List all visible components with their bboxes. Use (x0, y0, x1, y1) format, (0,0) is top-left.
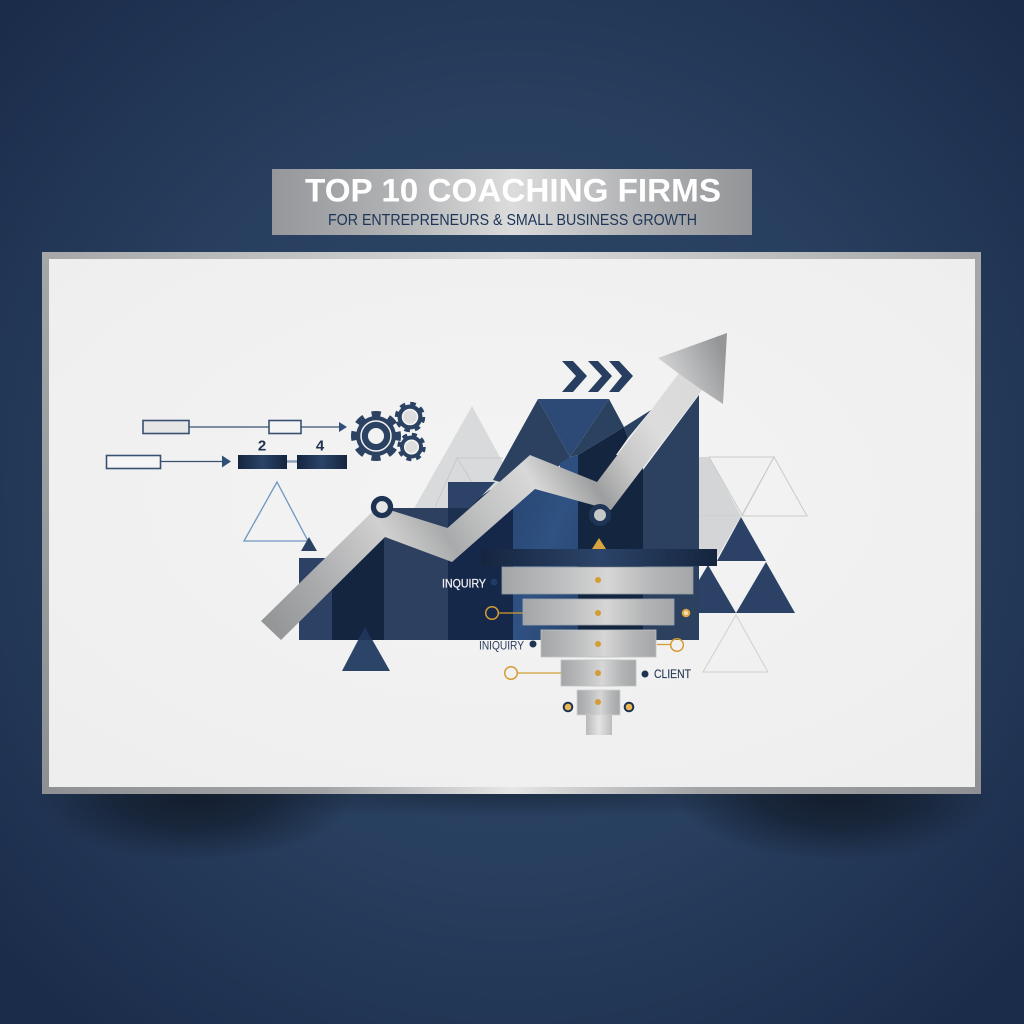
gold triangle (592, 538, 606, 549)
bar 4 upper part (448, 482, 495, 508)
bar 5 (513, 470, 578, 640)
icon: bottom triangle (342, 627, 390, 671)
tier 6 (586, 715, 612, 735)
flow row one (143, 420, 347, 434)
arrow shaft (261, 365, 702, 640)
flow row two (106, 455, 347, 469)
dark triangles right (699, 517, 795, 613)
bar 4 (448, 490, 514, 640)
bar 3 (384, 508, 448, 640)
tier 5 (577, 690, 620, 715)
growth arrow (261, 333, 727, 640)
panel: main card (42, 252, 981, 794)
bar chart (299, 395, 699, 640)
large gear (354, 414, 398, 458)
label: inquiry: INQUIRY (442, 576, 486, 590)
label: client (642, 669, 691, 681)
connector: gold ring right tier 3 (657, 639, 683, 651)
tier dots (595, 577, 601, 705)
label: iniquiry: INIQUIRY (479, 638, 524, 652)
tier 1 (502, 567, 693, 594)
connector: gold ring left tier 4 (505, 667, 561, 679)
tier 3 (541, 630, 656, 657)
bar 1 (299, 558, 332, 640)
arrow head (658, 333, 727, 404)
chevrons (562, 361, 633, 392)
marker: right bottom (625, 703, 633, 711)
card shadow (35, 730, 995, 860)
icon: outline triangle left (244, 482, 308, 541)
funnel (481, 549, 717, 735)
upper small gear (396, 404, 424, 430)
arrow node left (374, 498, 390, 516)
background triangles (412, 406, 807, 672)
icon: gears (354, 404, 424, 460)
label: client: CLIENT (654, 669, 691, 681)
process flow diagram (106, 420, 347, 469)
step number 4: 4 (316, 438, 325, 454)
bar 2 (332, 520, 384, 640)
bar 7 (643, 395, 699, 640)
marker: gold dot right tier 2 (683, 610, 689, 616)
icon: small dark triangle (301, 537, 317, 551)
tier 2 (523, 599, 674, 625)
step number 2: 2 (258, 438, 266, 454)
title banner (272, 169, 752, 235)
peak facets (493, 399, 651, 490)
title: TOP 10 COACHING FIRMS (305, 172, 721, 208)
triangle overlap (358, 627, 372, 640)
marker: left bottom (564, 703, 572, 711)
bar 4 overlap (448, 508, 470, 528)
subtitle: FOR ENTREPRENEURS & SMALL BUSINESS GROWTH (328, 212, 697, 229)
connector: gold ring left tier 2 (486, 607, 523, 619)
arrow node right (592, 506, 608, 524)
tier 4 (561, 660, 636, 686)
funnel top bar (481, 549, 717, 566)
bar 6 (578, 455, 643, 640)
lower small gear (399, 434, 424, 460)
